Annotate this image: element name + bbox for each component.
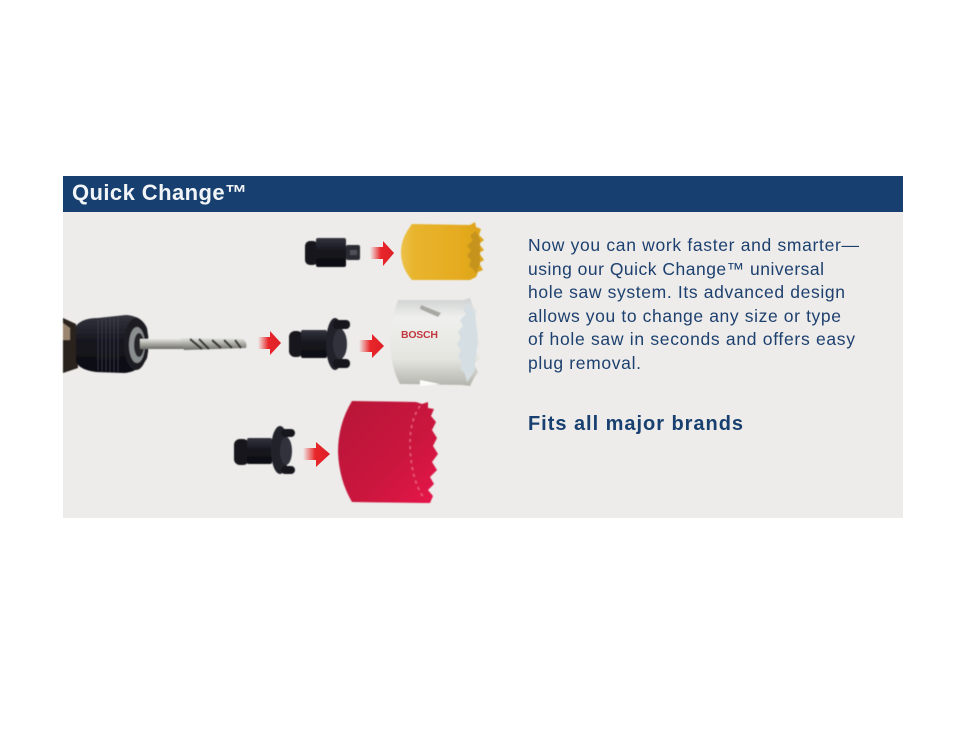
text block: description: allows you to change any size or type [528,306,841,326]
arrow: drill to adapter [258,331,281,355]
icon: yellow hole saw [401,222,484,280]
icon: bottom adapter [234,426,295,474]
icon: white Bosch hole saw [390,298,481,386]
icon: drill with chuck and bit [63,315,247,373]
icon: top hex adapter [305,238,360,267]
arrow: top adapter to yellow saw [370,241,394,266]
header bar [63,176,903,212]
icon: middle adapter [289,318,350,370]
callout: fits all major brands: Fits all major brands [528,413,743,435]
text block: description: Now you can work faster and smarter— [528,235,860,255]
arrow: bottom adapter to red saw [303,442,330,467]
heading: Quick Change: Quick Change™ [72,180,247,205]
text block: description: using our Quick Change™ universal [528,259,824,279]
text block: description: of hole saw in seconds and offers easy [528,329,855,349]
arrow: middle adapter to white saw [359,334,384,358]
icon: red hole saw [338,401,438,503]
logo: BOSCH: BOSCH [401,329,438,341]
panel: product background [63,212,903,518]
text block: description: hole saw system. Its advanced design [528,282,845,302]
text block: description: plug removal. [528,353,641,373]
text block: description [528,235,860,373]
